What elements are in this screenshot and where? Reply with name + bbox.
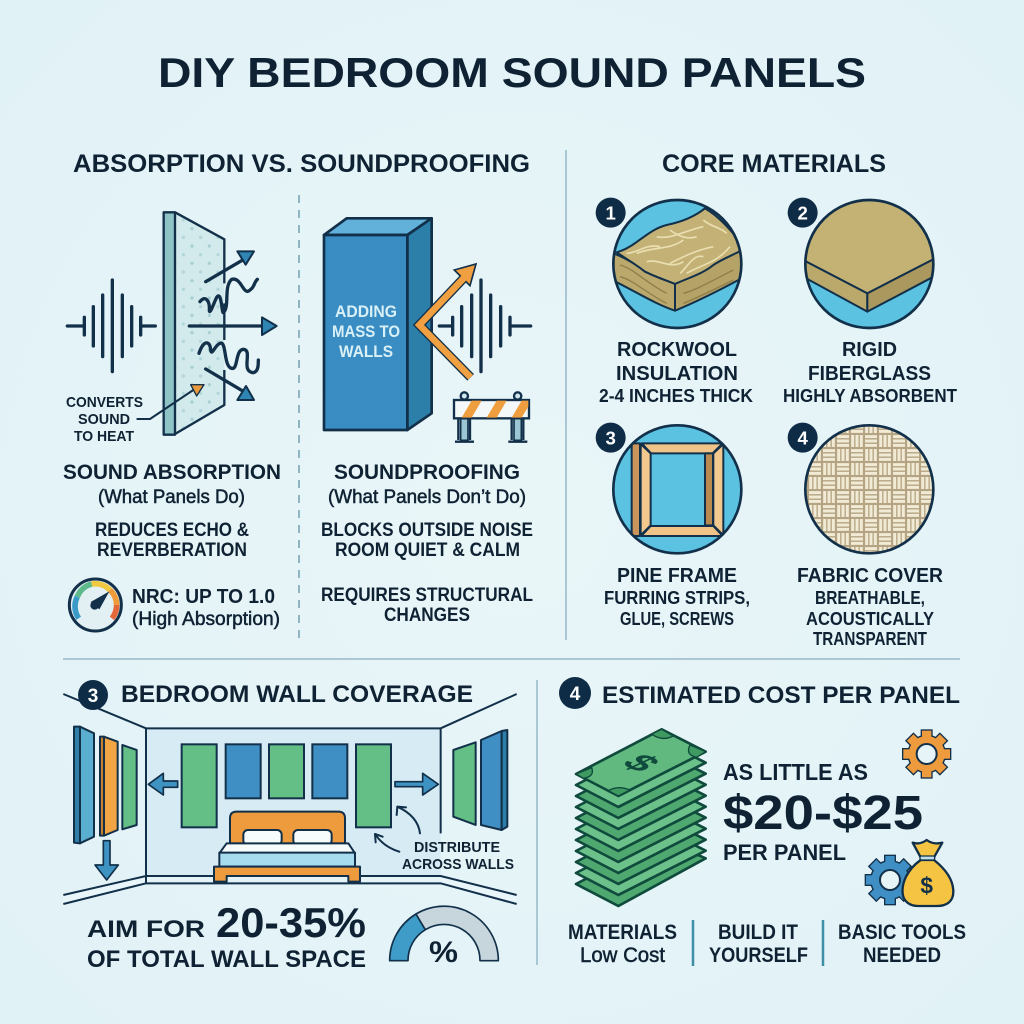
text block: sound absorption [63,461,281,561]
text block: NRC rating [132,586,280,630]
arrows: spread panels [95,773,438,880]
text block: sound absorption: REVERBERATION [97,539,247,561]
text block: pine frame: GLUE, SCREWS [620,608,734,629]
icon: reflected sound wave [439,280,531,372]
text block: fiberglass [783,339,958,406]
icon: fabric cover [805,425,933,553]
icon: money bag [903,840,953,906]
icon: stack of money [576,729,706,906]
text block: soundproofing: SOUNDPROOFING [334,461,520,484]
icon: bed [214,812,360,882]
badge 2: 2 [797,202,808,223]
text block: materials low cost: MATERIALS [568,921,677,944]
right wall panels [453,730,507,830]
text block: rockwool: 2-4 INCHES THICK [599,385,754,406]
wall label: MASS TO [332,323,400,341]
badge 3 [596,423,626,453]
text block: price [723,759,923,865]
panel: material icons rockwool and fiberglass [596,190,937,328]
text block: soundproofing: REQUIRES STRUCTURAL [321,584,533,606]
badge and heading: estimated cost: 4 [570,684,581,705]
badge and heading: bedroom wall coverage: BEDROOM WALL COVERAGE [121,681,473,708]
title: DIY BEDROOM SOUND PANELS [158,49,866,96]
callout: distribute across walls: DISTRIBUTE [414,839,500,856]
text block: fiberglass: RIGID [842,339,897,361]
back wall panels [182,744,391,827]
text block: pine frame [604,565,750,629]
text block: basic tools needed: BASIC TOOLS [838,921,966,944]
text block: soundproofing: CHANGES [384,604,470,626]
icon: blue gear [866,856,914,904]
badge 1 [596,198,626,228]
heading: absorption vs soundproofing: ABSORPTION VS. SOUNDPROOFING [73,150,530,178]
badge 1: 1 [605,202,616,223]
room walls and floor [63,694,517,904]
badge 3: 3 [605,427,616,448]
text block: fabric cover [797,565,944,649]
icon: rockwool [613,200,747,328]
icon: reflected arrow [419,264,476,377]
text block: build it yourself: YOURSELF [709,944,808,967]
text block: sound absorption: SOUND ABSORPTION [63,461,281,484]
panel: bedroom wall coverage illustration [63,694,517,904]
badge and heading: bedroom wall coverage: 3 [88,686,98,707]
text block: materials low cost [568,921,677,967]
icon: mass wall block [324,218,432,430]
text block: fabric cover: ACOUSTICALLY [806,608,935,629]
panel: material icons frame and fabric [596,423,933,553]
text block: basic tools needed: NEEDED [863,944,941,967]
icon: road barrier [454,392,529,442]
text block: pine frame: FURRING STRIPS, [604,587,750,608]
text block: rockwool: ROCKWOOL [617,339,737,361]
panel: soundproofing illustration [324,218,531,442]
wall label: WALLS [339,343,393,361]
icon: sound wave [67,280,155,372]
text block: rockwool [599,339,754,406]
text block: NRC rating: NRC: UP TO 1.0 [132,586,275,608]
wall label: ADDING [335,303,397,321]
icon: NRC gauge [69,579,121,631]
callout: converts sound to heat: SOUND [78,411,130,428]
dollar sign on bill: $ [612,750,670,776]
icon: orange gear [903,731,950,777]
text block: soundproofing: ROOM QUIET & CALM [335,539,520,561]
text block: sound absorption: (What Panels Do) [98,487,245,508]
panel: cost icons: $ [920,872,933,898]
text block: price: AS LITTLE AS [723,759,868,785]
text block: coverage target: 20-35% [216,899,366,946]
text block: soundproofing: BLOCKS OUTSIDE NOISE [321,519,533,541]
text block: soundproofing: (What Panels Don’t Do) [328,487,526,508]
text block: basic tools needed [838,921,966,967]
text block: price: $20-$25 [723,787,923,840]
text block: rockwool: INSULATION [616,363,738,385]
text block: coverage target: OF TOTAL WALL SPACE [87,946,366,973]
text block: fiberglass: FIBERGLASS [808,363,931,385]
chart: percent gauge [390,906,498,969]
icon: acoustic panel [164,212,224,435]
text block: price: PER PANEL [723,840,846,865]
text block: fabric cover: BREATHABLE, [815,587,925,608]
text block: pine frame: PINE FRAME [617,565,737,587]
callout: distribute across walls: ACROSS WALLS [402,856,514,873]
icon: rigid fiberglass [800,190,937,328]
text block: coverage target: AIM FOR [87,916,205,943]
text block: fiberglass: HIGHLY ABSORBENT [783,385,958,406]
panel: sound absorption illustration [67,212,277,435]
wall label [332,303,400,361]
curved arrows: distribute [375,807,420,852]
badge 2 [788,198,818,228]
callout: distribute across walls [402,839,514,873]
badge 4: 4 [797,427,808,448]
callout: converts sound to heat [66,394,143,445]
badge 4 [788,423,818,453]
panel: cost icons [576,729,953,906]
text block: build it yourself [709,921,808,967]
heading: core materials: CORE MATERIALS [662,150,886,178]
text block: materials low cost: Low Cost [580,944,665,967]
text block: NRC rating: (High Absorption) [132,609,280,630]
text block: fabric cover: FABRIC COVER [797,565,944,587]
text block: sound absorption: REDUCES ECHO & [95,519,249,541]
left wall panels [74,727,137,843]
text block: soundproofing [321,461,533,626]
callout: converts sound to heat: TO HEAT [74,428,134,445]
icon: pine frame [613,425,741,553]
text block: fabric cover: TRANSPARENT [813,628,928,649]
text block: coverage target [87,899,366,973]
badge and heading: estimated cost: ESTIMATED COST PER PANEL [602,682,960,709]
icon: sound arrows and squiggles [137,251,277,419]
callout: converts sound to heat: CONVERTS [66,394,143,411]
text block: build it yourself: BUILD IT [718,921,798,944]
chart: percent gauge: % [429,936,458,969]
